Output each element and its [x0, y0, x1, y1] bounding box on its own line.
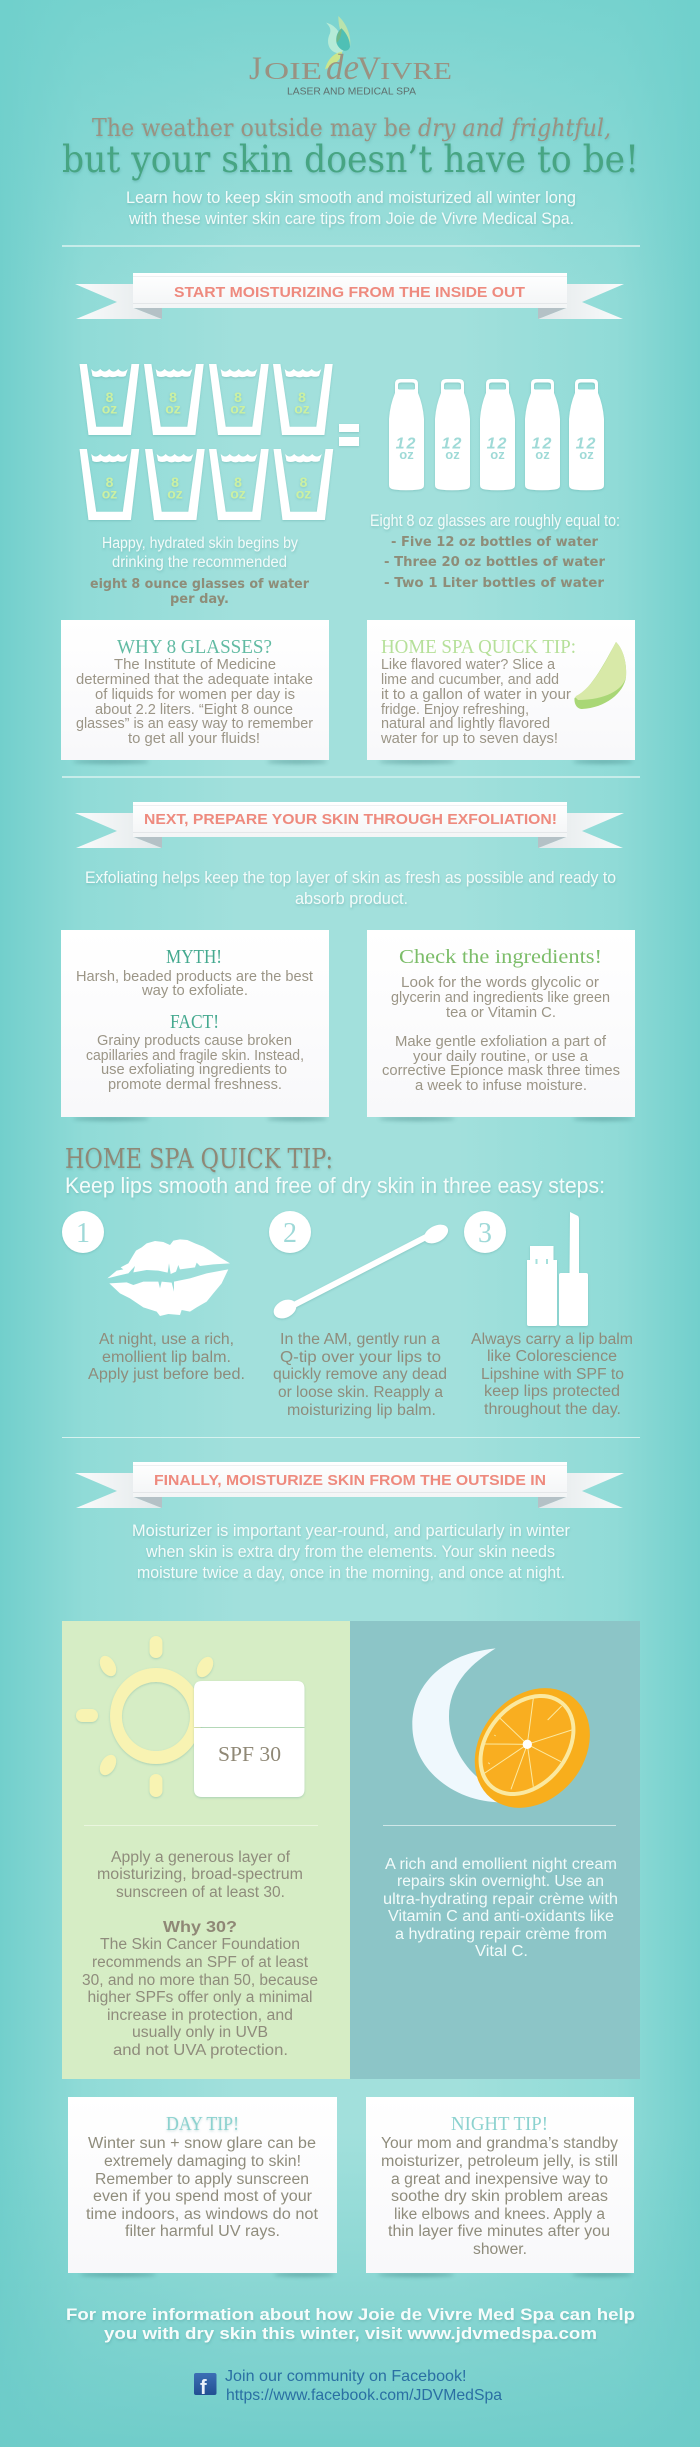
icon: lip balm tube: [527, 1212, 588, 1326]
icon: bottle: oz: [490, 447, 505, 462]
fact text: [86, 1032, 304, 1093]
text: hydrated skin: drinking the recommended: [112, 554, 287, 571]
body text: sunscreen of at least 30.: [116, 1884, 285, 1901]
body text: a great and inexpensive way to: [391, 2171, 608, 2188]
logo wordmark: V: [357, 51, 381, 87]
body text: [383, 1856, 618, 1960]
text: hydrated skin: per day.: [170, 592, 229, 607]
body text: Vital C.: [475, 1943, 528, 1960]
body text: thin layer five minutes after you: [388, 2223, 610, 2240]
panel: day tip: [68, 2097, 337, 2277]
step 2 text: In the AM, gently run a: [280, 1331, 440, 1348]
body text: why 30: recommends an SPF of at least: [92, 1954, 309, 1971]
fact text: promote dermal freshness.: [108, 1076, 282, 1093]
text: hydrated skin: eight 8 ounce glasses of water: [90, 577, 310, 592]
body text: glycerin and ingredients like green: [391, 989, 610, 1006]
body text: Vitamin C and anti-oxidants like: [388, 1908, 614, 1925]
text: facebook link: Join our community on Facebook!: [225, 2368, 466, 2385]
body text: why 30: 30, and no more than 50, because: [82, 1972, 318, 1989]
panel: why 8 glasses: [61, 620, 329, 764]
logo wordmark: de: [326, 47, 359, 87]
body text: [381, 2135, 618, 2258]
icon: glass: [209, 364, 269, 435]
myth text: [76, 968, 314, 999]
step 3 text: keep lips protected: [484, 1383, 620, 1400]
icon: bottle: oz: [445, 447, 460, 462]
body text: corrective Epionce mask three times: [382, 1062, 620, 1079]
icon: bottle: [435, 379, 470, 490]
icon: sunscreen jar: [194, 1681, 304, 1797]
step 1 text: emollient lip balm.: [102, 1349, 231, 1366]
icon: glass: 8: [298, 389, 306, 405]
body text: soothe dry skin problem areas: [391, 2188, 608, 2205]
icon: glass: 8: [169, 389, 177, 405]
title: but your skin doesn’t have to be!: [62, 138, 639, 181]
body text: lime and cucumber, and add: [381, 671, 559, 688]
icon: bottle: 12: [442, 436, 463, 452]
text: hydrated skin: Happy, hydrated skin begins by: [102, 535, 298, 552]
text: moisturizer intro: when skin is extra dry from the elements. Your skin needs: [145, 1543, 555, 1561]
icon: crescent moon: [412, 1648, 505, 1802]
step 3 text: Always carry a lip balm: [471, 1331, 633, 1348]
intro text: Learn how to keep skin smooth and moisturized all winter long: [126, 189, 576, 207]
title: The weather outside may be dry and frightful,: [92, 114, 611, 142]
icon: number 1: [62, 1211, 104, 1253]
body text: it to a gallon of water in your: [381, 686, 571, 703]
heading: home spa quick tip lips: HOME SPA QUICK TIP:: [65, 1144, 333, 1175]
text: bottle equivalents: - Three 20 oz bottles of water: [384, 555, 606, 570]
icon: glass: [80, 449, 139, 520]
step 2 text: or loose skin. Reapply a: [278, 1384, 443, 1401]
body text: like elbows and knees. Apply a: [394, 2206, 605, 2223]
panel: home spa quick tip: [367, 620, 635, 764]
body text: about 2.2 liters. “Eight 8 ounce: [95, 701, 293, 718]
icon: number 3: [464, 1211, 506, 1253]
body text: tea or Vitamin C.: [446, 1004, 556, 1021]
body text: why 30: increase in protection, and: [107, 2007, 293, 2024]
body text: Winter sun + snow glare can be: [88, 2135, 316, 2152]
body text: Look for the words glycolic or: [401, 974, 599, 991]
text: facebook link: [225, 2368, 502, 2404]
icon: glass: oz: [102, 486, 117, 502]
heading: check the ingredients: Check the ingredients!: [399, 946, 602, 968]
heading: night tip: NIGHT TIP!: [451, 2113, 548, 2135]
body text: glasses” is an easy way to remember: [76, 715, 313, 732]
body text: Make gentle exfoliation a part of: [395, 1033, 607, 1050]
body text: Remember to apply sunscreen: [95, 2171, 309, 2188]
step 3: lip balm with SPF: [464, 1211, 633, 1418]
body text: your daily routine, or use a: [413, 1048, 589, 1065]
fact text: capillaries and fragile skin. Instead,: [86, 1047, 304, 1064]
body text: Like flavored water? Slice a: [381, 656, 556, 673]
logo: Joie de Vivre: [249, 16, 452, 98]
icon: glass: 8: [106, 389, 114, 405]
heading: home spa quick tip lips: [65, 1144, 605, 1198]
step 2 text: moisturizing lip balm.: [287, 1402, 436, 1419]
icon: bottle: 12: [576, 436, 597, 452]
body text: [380, 656, 571, 747]
icon: glass: oz: [294, 400, 310, 416]
body text: moisturizing, broad-spectrum: [97, 1866, 303, 1883]
heading: why 8 glasses: WHY 8 GLASSES?: [117, 636, 272, 658]
logo wordmark: J: [249, 51, 262, 87]
icon: glass: 8: [300, 474, 308, 490]
step 1 text: Apply just before bed.: [88, 1366, 245, 1383]
step 3 text: [471, 1331, 633, 1418]
body text: [382, 974, 620, 1094]
icon: bottle: oz: [399, 447, 414, 462]
title: [62, 114, 639, 181]
body text: of liquids for women per day is: [95, 686, 295, 703]
footer call to action: you with dry skin this winter, visit www.jdvmedspa.com: [104, 2324, 597, 2343]
text: bottle equivalents: - Two 1 Liter bottles of water: [384, 576, 605, 591]
icon: number 1: 1: [76, 1218, 90, 1249]
icon: glass: 8: [171, 474, 179, 490]
text: exfoliating intro: [85, 869, 616, 908]
icon: lime wedge: [574, 642, 626, 709]
myth text: Harsh, beaded products are the best: [76, 968, 314, 985]
body text: to get all your fluids!: [128, 730, 260, 747]
panel: night cream: [350, 1621, 640, 2079]
icon: glass: oz: [296, 486, 311, 502]
icon: glass: 8: [106, 474, 114, 490]
body text: water for up to seven days!: [380, 730, 558, 747]
heading: home spa quick tip lips: Keep lips smooth and free of dry skin in three easy steps:: [65, 1173, 605, 1198]
text: exfoliating intro: absorb product.: [295, 890, 408, 908]
text: bottle equivalents: - Five 12 oz bottles of water: [391, 535, 599, 550]
icon: glass: [145, 449, 205, 520]
body text: fridge. Enjoy refreshing,: [381, 701, 529, 718]
icon: glass: 8: [234, 389, 242, 405]
icon: q-tip: [270, 1221, 451, 1322]
icon: bottle: oz: [535, 447, 550, 462]
icon: bottle: oz: [579, 447, 594, 462]
myth text: way to exfoliate.: [141, 982, 248, 999]
icon group: eight glasses: [80, 364, 333, 520]
logo wordmark: [249, 47, 452, 87]
body text: ultra-hydrating repair crème with: [383, 1891, 618, 1908]
icon: glass: [80, 364, 139, 435]
icon: glass: [144, 364, 204, 435]
fact text: Grainy products cause broken: [97, 1032, 292, 1049]
logo tagline: LASER AND MEDICAL SPA: [287, 86, 416, 98]
panel: day sunscreen: [62, 1621, 350, 2079]
icon: orange slice: [451, 1665, 614, 1831]
icon: equals sign: [339, 424, 359, 446]
ribbon heading: start moisturizing: [75, 273, 624, 319]
icon: glass: 8: [234, 474, 242, 490]
icon: glass: oz: [230, 486, 246, 502]
icon: bottle: 12: [396, 436, 417, 452]
icon: bottle: [525, 379, 560, 490]
body text: why 30: [82, 1936, 318, 2059]
body text: Your mom and grandma’s standby: [381, 2135, 618, 2152]
icon: number 2: 2: [283, 1218, 297, 1249]
ribbon heading: exfoliation: NEXT, PREPARE YOUR SKIN THROUGH EXFOLIATION!: [144, 811, 557, 828]
body text: natural and lightly flavored: [381, 715, 550, 732]
icon: glass: oz: [230, 400, 246, 416]
body text: why 30: higher SPFs offer only a minimal: [88, 1989, 312, 2006]
step 1 text: [88, 1331, 245, 1383]
body text: why 30: usually only in UVB: [132, 2024, 268, 2041]
text: hydrated skin: [90, 535, 310, 607]
body text: [76, 656, 313, 747]
icon: sun: [76, 1636, 217, 1797]
body text: why 30: The Skin Cancer Foundation: [100, 1936, 300, 1953]
text: bottle equivalents: [370, 512, 620, 591]
ribbon heading: start moisturizing: START MOISTURIZING FROM THE INSIDE OUT: [174, 284, 525, 301]
ribbon heading: exfoliation: [75, 802, 624, 848]
icon: bottle: 12: [487, 436, 508, 452]
step 3 text: Lipshine with SPF to: [481, 1366, 624, 1383]
panel: myth and fact: [61, 930, 329, 1121]
step 3 text: like Colorescience: [487, 1348, 617, 1365]
heading: home spa quick tip: HOME SPA QUICK TIP:: [381, 636, 576, 658]
body text: A rich and emollient night cream: [385, 1856, 617, 1873]
icon: number 2: [269, 1211, 311, 1253]
intro text: with these winter skin care tips from Joie de Vivre Medical Spa.: [128, 210, 574, 228]
logo wordmark: OIE: [264, 59, 322, 85]
text: moisturizer intro: moisture twice a day, once in the morning, and once at night.: [137, 1564, 565, 1582]
body text: even if you spend most of your: [93, 2188, 312, 2205]
text: bottle equivalents: Eight 8 oz glasses are roughly equal to:: [370, 512, 620, 530]
body text: moisturizer, petroleum jelly, is still: [381, 2153, 618, 2170]
body text: shower.: [473, 2241, 527, 2258]
intro text: [126, 189, 576, 228]
icon: bottle: [569, 379, 604, 490]
panel: check the ingredients: [367, 930, 635, 1121]
step 3 text: throughout the day.: [484, 1401, 621, 1418]
ribbon heading: moisturize: [75, 1462, 624, 1508]
icon: lips: [107, 1239, 230, 1316]
icon: glass: [274, 449, 333, 520]
panel: night tip: [366, 2097, 634, 2277]
icon: number 3: 3: [478, 1218, 492, 1249]
body text: The Institute of Medicine: [114, 656, 276, 673]
heading: why 30: Why 30?: [163, 1919, 237, 1936]
body text: time indoors, as windows do not: [86, 2206, 319, 2223]
text: moisturizer intro: [132, 1522, 570, 1582]
icon: facebook: f: [200, 2377, 207, 2399]
icon: facebook: [194, 2373, 216, 2399]
heading: day tip: DAY TIP!: [166, 2113, 239, 2135]
body text: filter harmful UV rays.: [125, 2223, 280, 2240]
step 2 text: [273, 1331, 447, 1419]
icon: butterfly: [325, 16, 350, 69]
icon: glass: [273, 364, 333, 435]
icon: glass: oz: [167, 486, 183, 502]
body text: repairs skin overnight. Use an: [397, 1873, 604, 1890]
body text: Apply a generous layer of: [111, 1849, 291, 1866]
icon: sunscreen jar: SPF 30: [218, 1742, 281, 1766]
icon: glass: oz: [165, 400, 181, 416]
icon: bottle: [480, 379, 515, 490]
text: facebook link: https://www.facebook.com/JDVMedSpa: [226, 2387, 502, 2404]
icon group: five bottles: [389, 379, 604, 490]
footer call to action: [66, 2305, 635, 2343]
icon: glass: oz: [102, 400, 117, 416]
body text: determined that the adequate intake: [76, 671, 313, 688]
footer call to action: For more information about how Joie de Vivre Med Spa can help: [66, 2305, 635, 2324]
step 2: q-tip: [269, 1211, 451, 1419]
logo wordmark: IVRE: [380, 59, 452, 85]
body text: [97, 1849, 303, 1901]
heading: fact: FACT!: [170, 1011, 219, 1033]
icon: glass: [209, 449, 269, 520]
text: exfoliating intro: Exfoliating helps keep the top layer of skin as fresh as possible and ready to: [85, 869, 616, 887]
heading: myth: MYTH!: [166, 946, 222, 968]
body text: extremely damaging to skin!: [104, 2153, 301, 2170]
body text: a hydrating repair crème from: [395, 1926, 607, 1943]
step 2 text: Q-tip over your lips to: [280, 1349, 441, 1366]
text: moisturizer intro: Moisturizer is important year-round, and particularly in winter: [132, 1522, 570, 1540]
body text: why 30: and not UVA protection.: [113, 2042, 288, 2059]
body text: [86, 2135, 319, 2240]
body text: a week to infuse moisture.: [415, 1077, 587, 1094]
icon: bottle: 12: [532, 436, 553, 452]
fact text: use exfoliating ingredients to: [101, 1061, 287, 1078]
ribbon heading: moisturize: FINALLY, MOISTURIZE SKIN FROM THE OUTSIDE IN: [154, 1472, 546, 1489]
step 1: lip balm at night: [62, 1211, 245, 1383]
step 1 text: At night, use a rich,: [99, 1331, 234, 1348]
step 2 text: quickly remove any dead: [273, 1366, 447, 1383]
icon: bottle: [389, 379, 424, 490]
